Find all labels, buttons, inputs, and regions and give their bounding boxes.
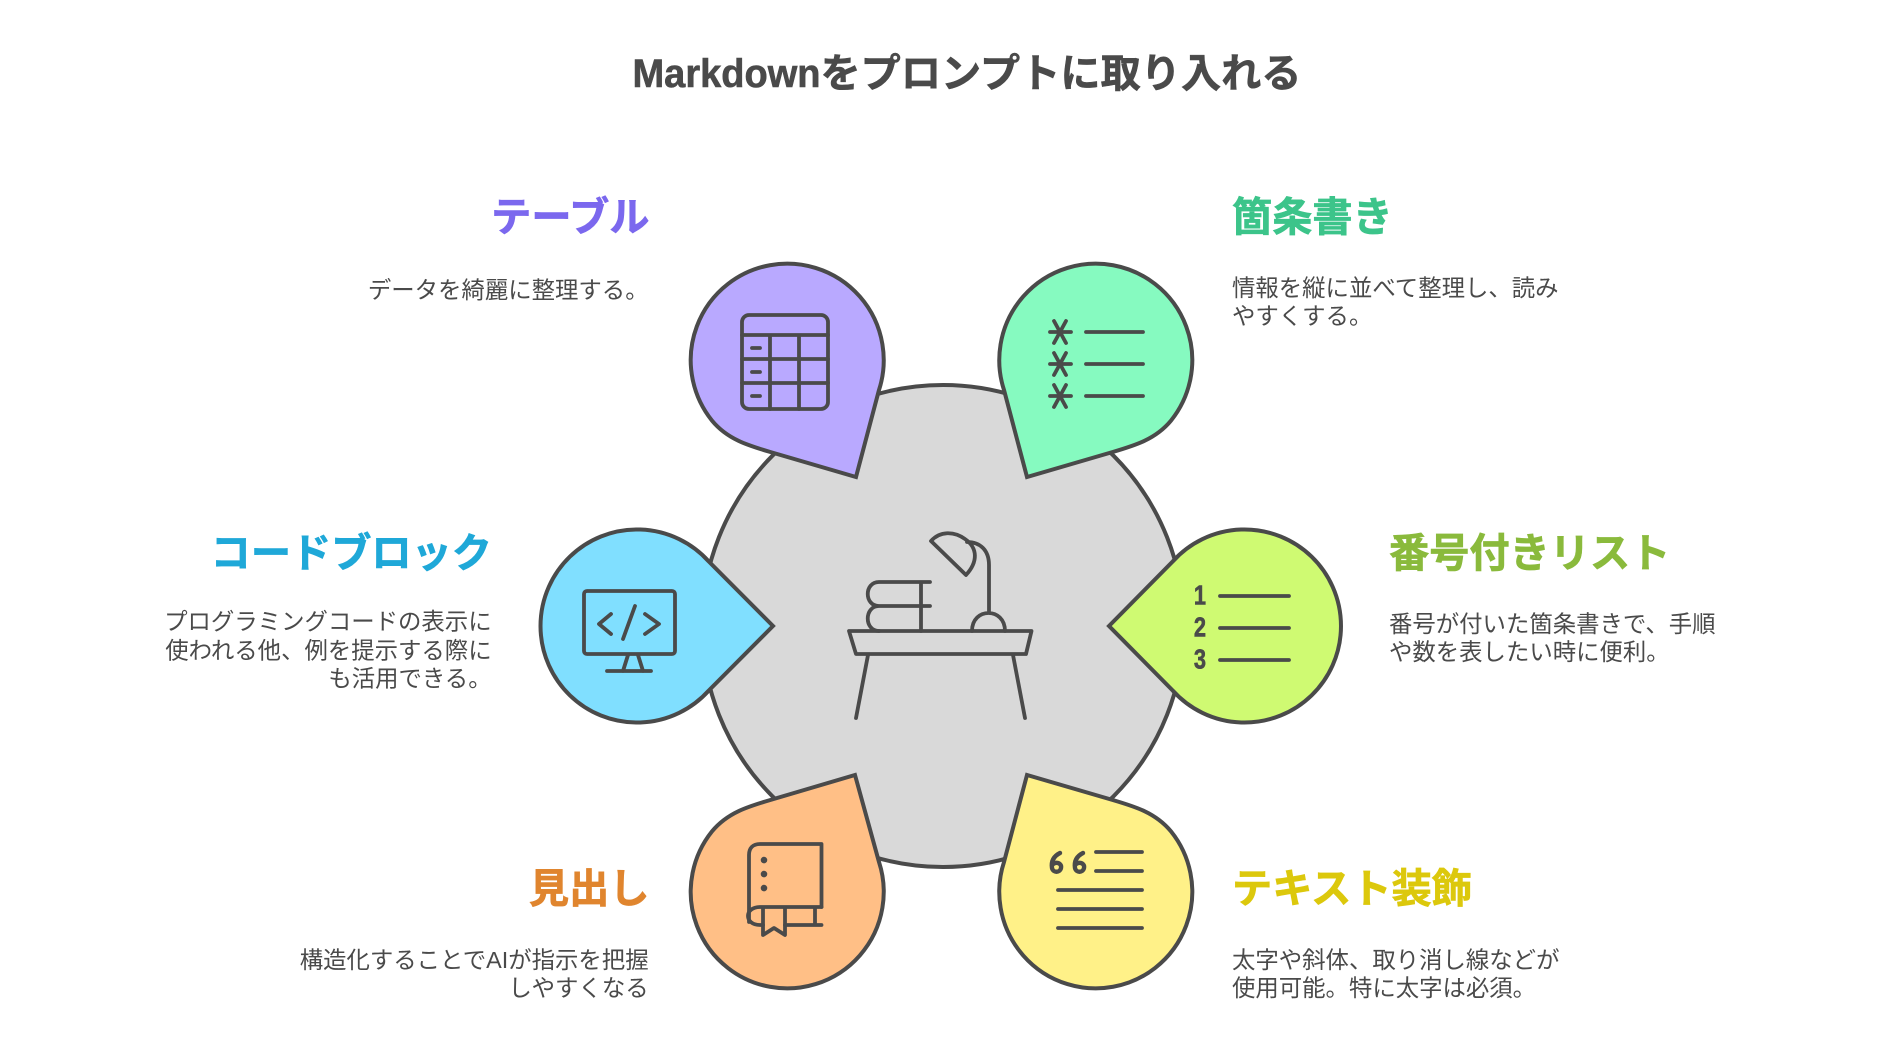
icon: numbered list [1194, 580, 1289, 675]
text: text decoration description: 太字や斜体、取り消し線などが [1232, 947, 1559, 973]
text: code block description: 使われる他、例を提示する際に [165, 638, 492, 664]
icon: bullet list [1050, 321, 1143, 407]
panel: code block pin [541, 529, 773, 722]
panel: table pin [691, 264, 884, 477]
heading: headings: 見出し [529, 866, 650, 912]
heading: table: テーブル [491, 195, 650, 240]
title: Markdown [632, 52, 820, 96]
central grey circle [702, 385, 1184, 867]
panel: numbered list pin [1109, 530, 1341, 722]
icon: numbered list: 3 [1194, 644, 1206, 675]
icon: quote lines [1052, 852, 1142, 928]
text: text decoration description: 使用可能。特に太字は必須。 [1232, 975, 1536, 1001]
title: をプロンプトに取り入れる [820, 52, 1302, 96]
text: numbered list description: や数を表したい時に便利。 [1389, 639, 1670, 665]
heading: text decoration: テキスト装飾 [1232, 866, 1472, 912]
panel: text decoration pin [999, 775, 1192, 988]
text: headings description: 構造化することでAIが指示を把握 [300, 947, 649, 973]
heading: numbered list: 番号付きリスト [1389, 531, 1670, 576]
text: headings description: しやすくなる [508, 975, 649, 1001]
panel: bullet list pin [999, 264, 1192, 477]
icon: code monitor [584, 591, 675, 671]
icon: desk with books and lamp [849, 533, 1032, 718]
heading: bullet list: 箇条書き [1232, 195, 1393, 240]
text: numbered list description: 番号が付いた箇条書きで、手順 [1389, 611, 1716, 637]
text: bullet list description: 情報を縦に並べて整理し、読み [1232, 275, 1559, 301]
heading: code block: コードブロック [211, 531, 492, 576]
icon: numbered list: 1 [1194, 580, 1206, 611]
icon: table [742, 315, 828, 409]
icon: numbered list: 2 [1194, 612, 1206, 643]
text: code block description: も活用できる。 [328, 666, 492, 692]
text: bullet list description: やすくする。 [1232, 303, 1372, 329]
text: table description: データを綺麗に整理する。 [368, 277, 649, 303]
text: code block description: プログラミングコードの表示に [164, 609, 492, 635]
panel: heading pin [691, 775, 884, 988]
icon: book [748, 844, 822, 935]
